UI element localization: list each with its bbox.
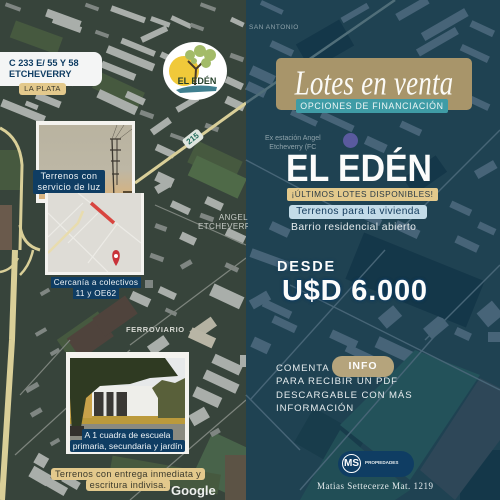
banner: Lotes en venta: Lotes en venta (295, 64, 453, 102)
logo: El Edén (163, 42, 227, 100)
route 215 badge (181, 128, 205, 150)
subtitle: financing: OPCIONES DE FINANCIACIÓN (300, 101, 444, 111)
banner: vivienda: Terrenos para la vivienda (296, 206, 420, 217)
text: barrio abierto: Barrio residencial abierto (291, 222, 416, 233)
route 215 badge: 215 (185, 131, 201, 146)
caption: power service (33, 170, 105, 194)
text: comenta (276, 363, 413, 414)
caption: power service: servicio de luz (37, 182, 101, 192)
callout: entrega inmediata: Terrenos con entrega inmediata y (55, 469, 201, 479)
subtitle: financing (296, 99, 448, 113)
map label: Ex estacion: Ex estación Angel (265, 135, 321, 142)
caption: colectivos: Cercanía a colectivos (54, 278, 138, 287)
callout: entrega inmediata: escritura indivisa. (90, 480, 166, 490)
map label: Ex estacion (265, 134, 321, 151)
map label: Ex estacion: Etcheverry (FC (269, 144, 316, 151)
logo: MS Propiedades: PROPIEDADES (365, 460, 398, 465)
logo: El Edén: EL EDÉN (178, 76, 216, 86)
dark blue overlay (246, 0, 500, 500)
photo card: power line (36, 121, 135, 203)
address card: ETCHEVERRY (9, 69, 71, 79)
map label: Ferroviario: FERROVIARIO (126, 325, 185, 334)
info pill: INFO (348, 360, 378, 372)
address card (0, 52, 102, 86)
logo: MS Propiedades (338, 451, 414, 477)
map label: Angel Etcheverry (198, 214, 248, 230)
location tag: La Plata: LA PLATA (24, 84, 61, 93)
text: comenta: COMENTA (276, 363, 330, 374)
price: U$D 6.000 (282, 275, 428, 307)
caption: school (70, 429, 185, 452)
callout: entrega inmediata (51, 468, 205, 491)
right map (245, 0, 500, 500)
title: El Edén: EL EDÉN (286, 148, 432, 190)
Google watermark: Google (171, 483, 216, 498)
text: comenta: DESCARGABLE CON MÁS (276, 390, 413, 401)
photo card: school (66, 352, 189, 454)
text: comenta: INFORMACIÓN (276, 403, 354, 414)
caption: colectivos: 11 y OE62 (76, 288, 116, 298)
text: comenta: PARA RECIBIR UN PDF (276, 376, 398, 387)
map pin icon (343, 133, 358, 148)
logo: MS Propiedades: MS (344, 458, 359, 469)
caption: school: A 1 cuadra de escuela (84, 430, 170, 440)
caption: power service: Terrenos con (41, 171, 97, 181)
address card: C 233 E/ 55 Y 58 (9, 58, 79, 68)
banner: últimos lotes: ¡ÚLTIMOS LOTES DISPONIBLES! (292, 189, 433, 199)
banner: Lotes en venta (276, 58, 472, 110)
info pill (332, 356, 394, 377)
map card: colectivos (45, 193, 144, 275)
location tag: La Plata (19, 83, 66, 95)
caption: school: primaria, secundaria y jardín (73, 440, 182, 450)
map label: San Antonio: SAN ANTONIO (249, 24, 299, 31)
text: agent license: Matias Settecerze Mat. 1219 (317, 481, 433, 491)
caption: colectivos (51, 277, 141, 299)
label: desde: DESDE (277, 259, 336, 275)
